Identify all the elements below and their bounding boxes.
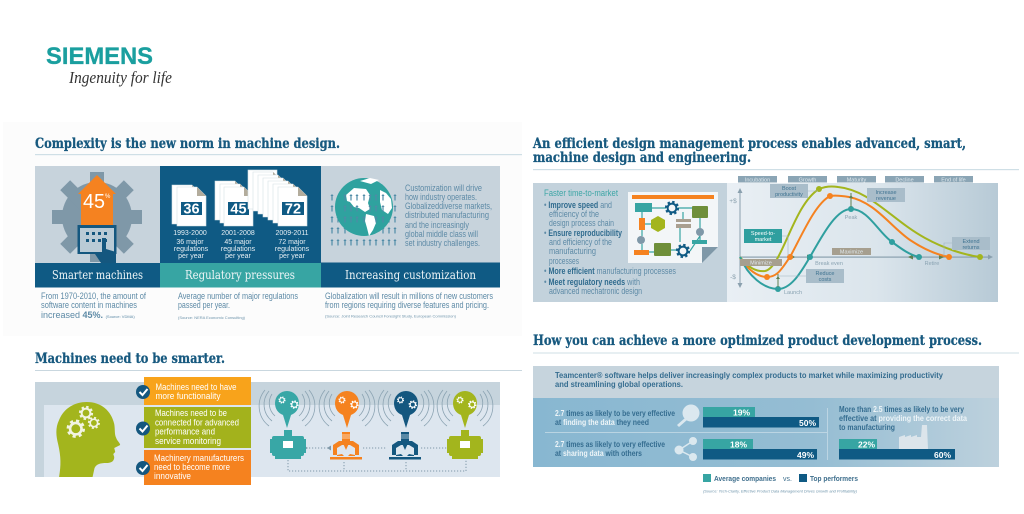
panel: teamcenter stats [533, 366, 999, 467]
callout: boost productivity [770, 184, 808, 198]
callout: maximize: Maximize [840, 250, 863, 256]
text: customization description: (Source: Joint Research Council Foresight Study, European Commission) [325, 314, 457, 318]
legend: Top performers [810, 474, 858, 483]
callout: extend returns: Extend [962, 239, 980, 245]
bar chart: sharing data: 49% [797, 450, 814, 460]
text: benefits list: • Improve speed and [544, 200, 612, 210]
callout: boost productivity: Boost [782, 186, 796, 192]
panel: smarter machines [35, 166, 160, 288]
box: innovative: need to become more [154, 462, 230, 472]
label: 2009-2011: per year [279, 253, 306, 260]
documents 36 [172, 185, 206, 226]
icon: check marks [136, 385, 150, 475]
panel: machines need to be smarter [35, 377, 500, 485]
text: benefits list: manufacturing [549, 246, 596, 256]
text: regulatory description: (Source: NERA Economic Consulting) [178, 315, 246, 320]
box: more functionality: Machines need to have [156, 382, 236, 392]
text: benefits list: Faster time-to-market [544, 188, 618, 198]
callout: increase revenue: Increase [875, 190, 897, 196]
bar chart: finding data: 50% [799, 418, 816, 428]
label: 2009-2011: 2009-2011 [276, 230, 309, 237]
panel: faster time-to-market [533, 183, 727, 302]
documents 72: 72 [285, 202, 301, 218]
legend: Average companies [714, 474, 776, 483]
heading: efficient design: machine design and engineering. [533, 150, 751, 166]
text: customization: Customization will drive [405, 183, 482, 193]
stat: correct data [839, 404, 967, 432]
icon: orange arrow 45% [78, 175, 116, 226]
text: smarter machines description: From 1970-2010, the amount of [41, 291, 146, 301]
text: benefits list [544, 188, 676, 296]
bar chart: correct data: 22% [858, 440, 875, 450]
panel: product lifecycle chart [727, 176, 998, 302]
stage labels [738, 176, 973, 184]
text: smarter machines description: software content in machines [41, 300, 137, 310]
documents 45 [215, 181, 253, 226]
stage labels: Growth [799, 178, 816, 184]
diagram: connected dotted links [288, 446, 466, 471]
text: benefits list: • Meet regulatory needs with [544, 277, 640, 287]
stat: sharing data: 2.7 times as likely to very effective [555, 439, 665, 449]
callout: reduce costs: costs [819, 277, 832, 283]
bar chart: correct data [839, 439, 955, 460]
bar chart: sharing data [703, 439, 817, 460]
stat: correct data: effective at providing the correct data [839, 413, 967, 423]
band: regulatory pressures [160, 263, 321, 288]
callout: increase revenue: revenue [876, 196, 896, 202]
icon: keypad and hand [78, 225, 116, 263]
callout: minimize [740, 259, 782, 266]
text: benefits list: • More efficient manufacturing processes [544, 266, 676, 276]
text: regulatory description: Average number of major regulations [178, 291, 298, 301]
icon: people grid [330, 194, 397, 246]
machine 3: blue [378, 390, 434, 460]
logo: Siemens: SIEMENS [46, 43, 153, 70]
axes [729, 188, 993, 288]
stat: correct data: to manufacturing [839, 422, 895, 432]
callout: maximize [832, 248, 871, 256]
text: benefits list: efficiency of the [549, 209, 599, 219]
chart annotations [776, 191, 952, 296]
icon: orange arrow 45%: % [105, 194, 111, 200]
text: benefits list: and efficiency of the [549, 237, 612, 247]
icon: orange arrow 45%: 45 [83, 191, 105, 213]
label: 2009-2011: regulations [275, 246, 310, 253]
box: connected: service monitoring [155, 436, 221, 446]
text: customization description: Globalization will result in millions of new customers [325, 291, 493, 301]
label: 2001-2008: 45 major [224, 239, 252, 246]
heading: machines: Machines need to be smarter. [35, 351, 225, 367]
text: customization: Globalizeddiverse markets, [405, 201, 492, 211]
stat: sharing data [555, 439, 665, 458]
stage labels: Incubation [745, 178, 770, 184]
bar chart: finding data [703, 407, 819, 428]
stage labels: End of life [941, 178, 966, 184]
bar chart: finding data: 19% [733, 408, 750, 418]
stat: finding data [555, 408, 675, 427]
text: benefits list: advanced mechatronic design [549, 286, 642, 296]
text: customization: set industry challenges. [405, 238, 480, 248]
band: increasing customization: Increasing customization [345, 267, 476, 282]
band: regulatory pressures: Regulatory pressures [185, 267, 295, 282]
label: 1993-2000: per year [178, 253, 205, 260]
stat: correct data: More than 2.5 times as likely to be very [839, 404, 964, 414]
box: innovative: innovative [154, 471, 191, 481]
callout: reduce costs [806, 269, 844, 283]
text: smarter machines description [41, 291, 146, 320]
stat: sharing data: at sharing data with others [555, 448, 642, 458]
stat: finding data: at finding the data they need [555, 417, 649, 427]
callout: extend returns [952, 237, 990, 251]
text: customization: distributed manufacturing [405, 210, 489, 220]
callout: speed-to-market: Speed-to- [751, 231, 775, 237]
box: more functionality [144, 377, 251, 405]
stage labels: Decline [895, 178, 914, 184]
text: customization description [325, 291, 493, 318]
label: 1993-2000: regulations [174, 246, 209, 253]
label: 1993-2000: 1993-2000 [173, 230, 207, 237]
legend [703, 474, 858, 483]
icon: head with gears [56, 402, 120, 477]
box: connected: Machines need to be [155, 408, 227, 418]
callout: speed-to-market: market [755, 237, 772, 243]
label: 2001-2008: per year [225, 253, 252, 260]
label: 1993-2000 [173, 230, 209, 260]
icon: factory [899, 425, 928, 449]
curve: green [740, 186, 983, 271]
text: benefits list: • Ensure reproducibility [544, 228, 622, 238]
box: innovative: Machinery manufacturers [154, 453, 244, 463]
text: benefits list: design process chain [549, 218, 614, 228]
panel: regulatory pressures [160, 166, 321, 288]
diagram: process chain [628, 192, 718, 263]
callout: minimize: Minimize [750, 260, 772, 266]
machine 1: teal [259, 390, 315, 459]
stage labels: Maturity [847, 178, 867, 184]
chart annotations: Retire [925, 261, 939, 267]
box: connected: connected for advanced [155, 418, 239, 428]
documents 36: 36 [183, 202, 200, 218]
callout: speed-to-market [744, 229, 782, 243]
stat: finding data: 2.7 times as likely to be very effective [555, 408, 675, 418]
box: connected: performance and [155, 426, 215, 436]
heading: efficient design [532, 136, 966, 166]
text: benefits list: processes [549, 256, 579, 266]
heading: complexity: Complexity is the new norm in machine design. [35, 136, 340, 152]
text: smarter machines description: increased 45%. (Source: VDMA) [41, 310, 135, 320]
icon: globe [335, 178, 393, 236]
text: regulatory description: passed per year. [178, 300, 230, 310]
logo: Siemens [46, 43, 172, 87]
box: innovative [144, 450, 251, 485]
text: customization [405, 183, 492, 248]
callout: extend returns: returns [962, 245, 980, 251]
source note: (Source: Tech-Clarity, Effective Product Data Management Drives Growth and Profitability) [703, 488, 858, 494]
icon: magnifier [677, 404, 700, 427]
callout: boost productivity: productivity [775, 192, 803, 198]
text: customization: and the increasingly [405, 220, 469, 230]
axes: +$ [729, 198, 737, 205]
machine 2: orange [319, 390, 375, 460]
band: smarter machines: Smarter machines [52, 267, 143, 282]
box: connected [144, 407, 251, 448]
callout: reduce costs: Reduce [816, 271, 834, 277]
documents 45: 45 [230, 202, 247, 218]
curve: orange [740, 193, 952, 280]
chart annotations: Break even [815, 261, 843, 267]
label: 2009-2011 [275, 230, 310, 260]
label: 2001-2008: regulations [221, 246, 256, 253]
documents 72 [248, 170, 307, 226]
chart annotations: Peak [845, 215, 858, 221]
label: 2009-2011: 72 major [278, 239, 306, 246]
axes: -$ [730, 274, 736, 281]
text: customization description: from regions requiring diverse features and pricing. [325, 300, 489, 310]
bar chart: sharing data: 18% [730, 440, 747, 450]
text: teamcenter intro [555, 370, 943, 389]
text: teamcenter intro: and streamlining global operations. [555, 379, 683, 389]
curve: teal [740, 206, 922, 292]
text: customization: global middle class will [405, 229, 478, 239]
icon: gear [52, 172, 142, 262]
machine 4: green [437, 390, 493, 459]
legend: vs. [783, 476, 792, 483]
chart annotations: Launch [784, 290, 802, 296]
callout: increase revenue [867, 188, 905, 202]
logo: Siemens: Ingenuity for life [68, 68, 172, 87]
band: increasing customization [321, 262, 500, 288]
box: more functionality: more functionality [156, 391, 221, 401]
label: 2001-2008: 2001-2008 [221, 230, 255, 237]
panel: increasing customization [321, 166, 500, 288]
icon: share [675, 438, 696, 460]
text: customization: how industry operates. [405, 192, 477, 202]
label: 1993-2000: 36 major [176, 239, 204, 246]
text: regulatory description [178, 291, 298, 320]
label: 2001-2008 [221, 230, 256, 260]
text: teamcenter intro: Teamcenter® software helps deliver increasingly complex products to market while maximizing productivity [555, 370, 943, 380]
bar chart: correct data: 60% [934, 450, 951, 460]
